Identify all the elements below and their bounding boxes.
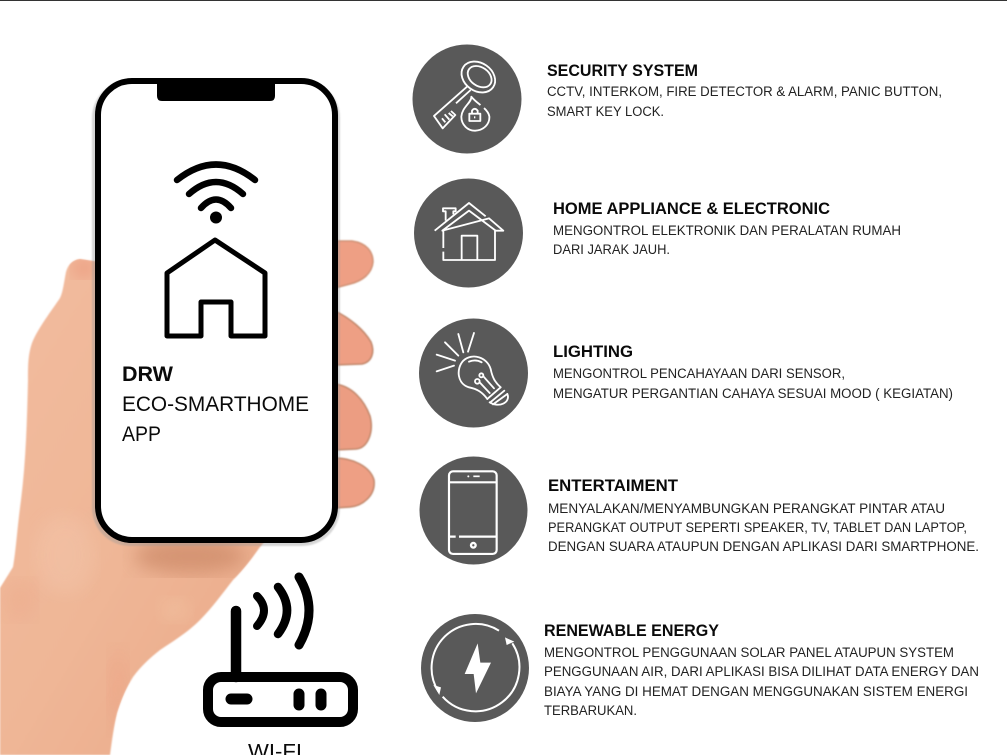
top border line <box>0 0 1007 1</box>
description <box>548 501 979 554</box>
app title: ECO-SMARTHOME <box>122 393 309 416</box>
icon: house <box>414 178 523 288</box>
app title: DRW <box>122 363 173 386</box>
description: DARI JARAK JAUH. <box>553 242 670 257</box>
panel: security system <box>412 44 942 154</box>
icon: key and lock <box>412 44 522 154</box>
heading: SECURITY SYSTEM <box>547 61 698 80</box>
icon: light bulb <box>419 318 528 428</box>
panel: home appliance <box>414 178 901 288</box>
description <box>553 223 901 257</box>
description: CCTV, INTERKOM, FIRE DETECTOR & ALARM, PANIC BUTTON, <box>547 84 942 99</box>
icon: phone house <box>167 240 265 336</box>
description: DENGAN SUARA ATAUPUN DENGAN APLIKASI DARI SMARTPHONE. <box>548 539 979 554</box>
heading: HOME APPLIANCE & ELECTRONIC <box>553 199 830 218</box>
description: MENGONTROL PENCAHAYAAN DARI SENSOR, <box>553 366 845 381</box>
panel: renewable energy <box>421 614 979 722</box>
description: PENGGUNAAN AIR, DARI APLIKASI BISA DILIHAT DATA ENERGY DAN <box>544 664 979 679</box>
description: MENYALAKAN/MENYAMBUNGKAN PERANGKAT PINTAR ATAU <box>548 501 945 516</box>
icon: energy cycle bolt <box>421 614 529 722</box>
description: TERBARUKAN. <box>544 703 637 718</box>
description: SMART KEY LOCK. <box>547 104 664 119</box>
hand holding phone <box>0 241 374 755</box>
description <box>544 645 979 718</box>
app title <box>122 363 309 446</box>
icon: smartphone <box>420 456 528 564</box>
description <box>547 84 942 119</box>
icon: phone wifi signal <box>177 164 255 224</box>
description: MENGONTROL ELEKTRONIK DAN PERALATAN RUMAH <box>553 223 901 238</box>
description <box>553 366 953 401</box>
description: PERANGKAT OUTPUT SEPERTI SPEAKER, TV, TABLET DAN LAPTOP, <box>548 520 967 535</box>
phone notch <box>157 82 275 101</box>
heading: LIGHTING <box>553 342 633 361</box>
heading: RENEWABLE ENERGY <box>544 621 720 640</box>
icon: wifi router <box>208 577 353 722</box>
panel: entertainment <box>420 456 979 564</box>
panel: lighting <box>419 318 953 428</box>
description: MENGONTROL PENGGUNAAN SOLAR PANEL ATAUPUN SYSTEM <box>544 645 954 660</box>
heading: ENTERTAIMENT <box>548 476 679 495</box>
description: MENGATUR PERGANTIAN CAHAYA SESUAI MOOD ( KEGIATAN) <box>553 386 953 401</box>
description: BIAYA YANG DI HEMAT DENGAN MENGGUNAKAN SISTEM ENERGI <box>544 684 968 699</box>
app title: APP <box>122 423 161 446</box>
smartphone <box>92 80 340 546</box>
